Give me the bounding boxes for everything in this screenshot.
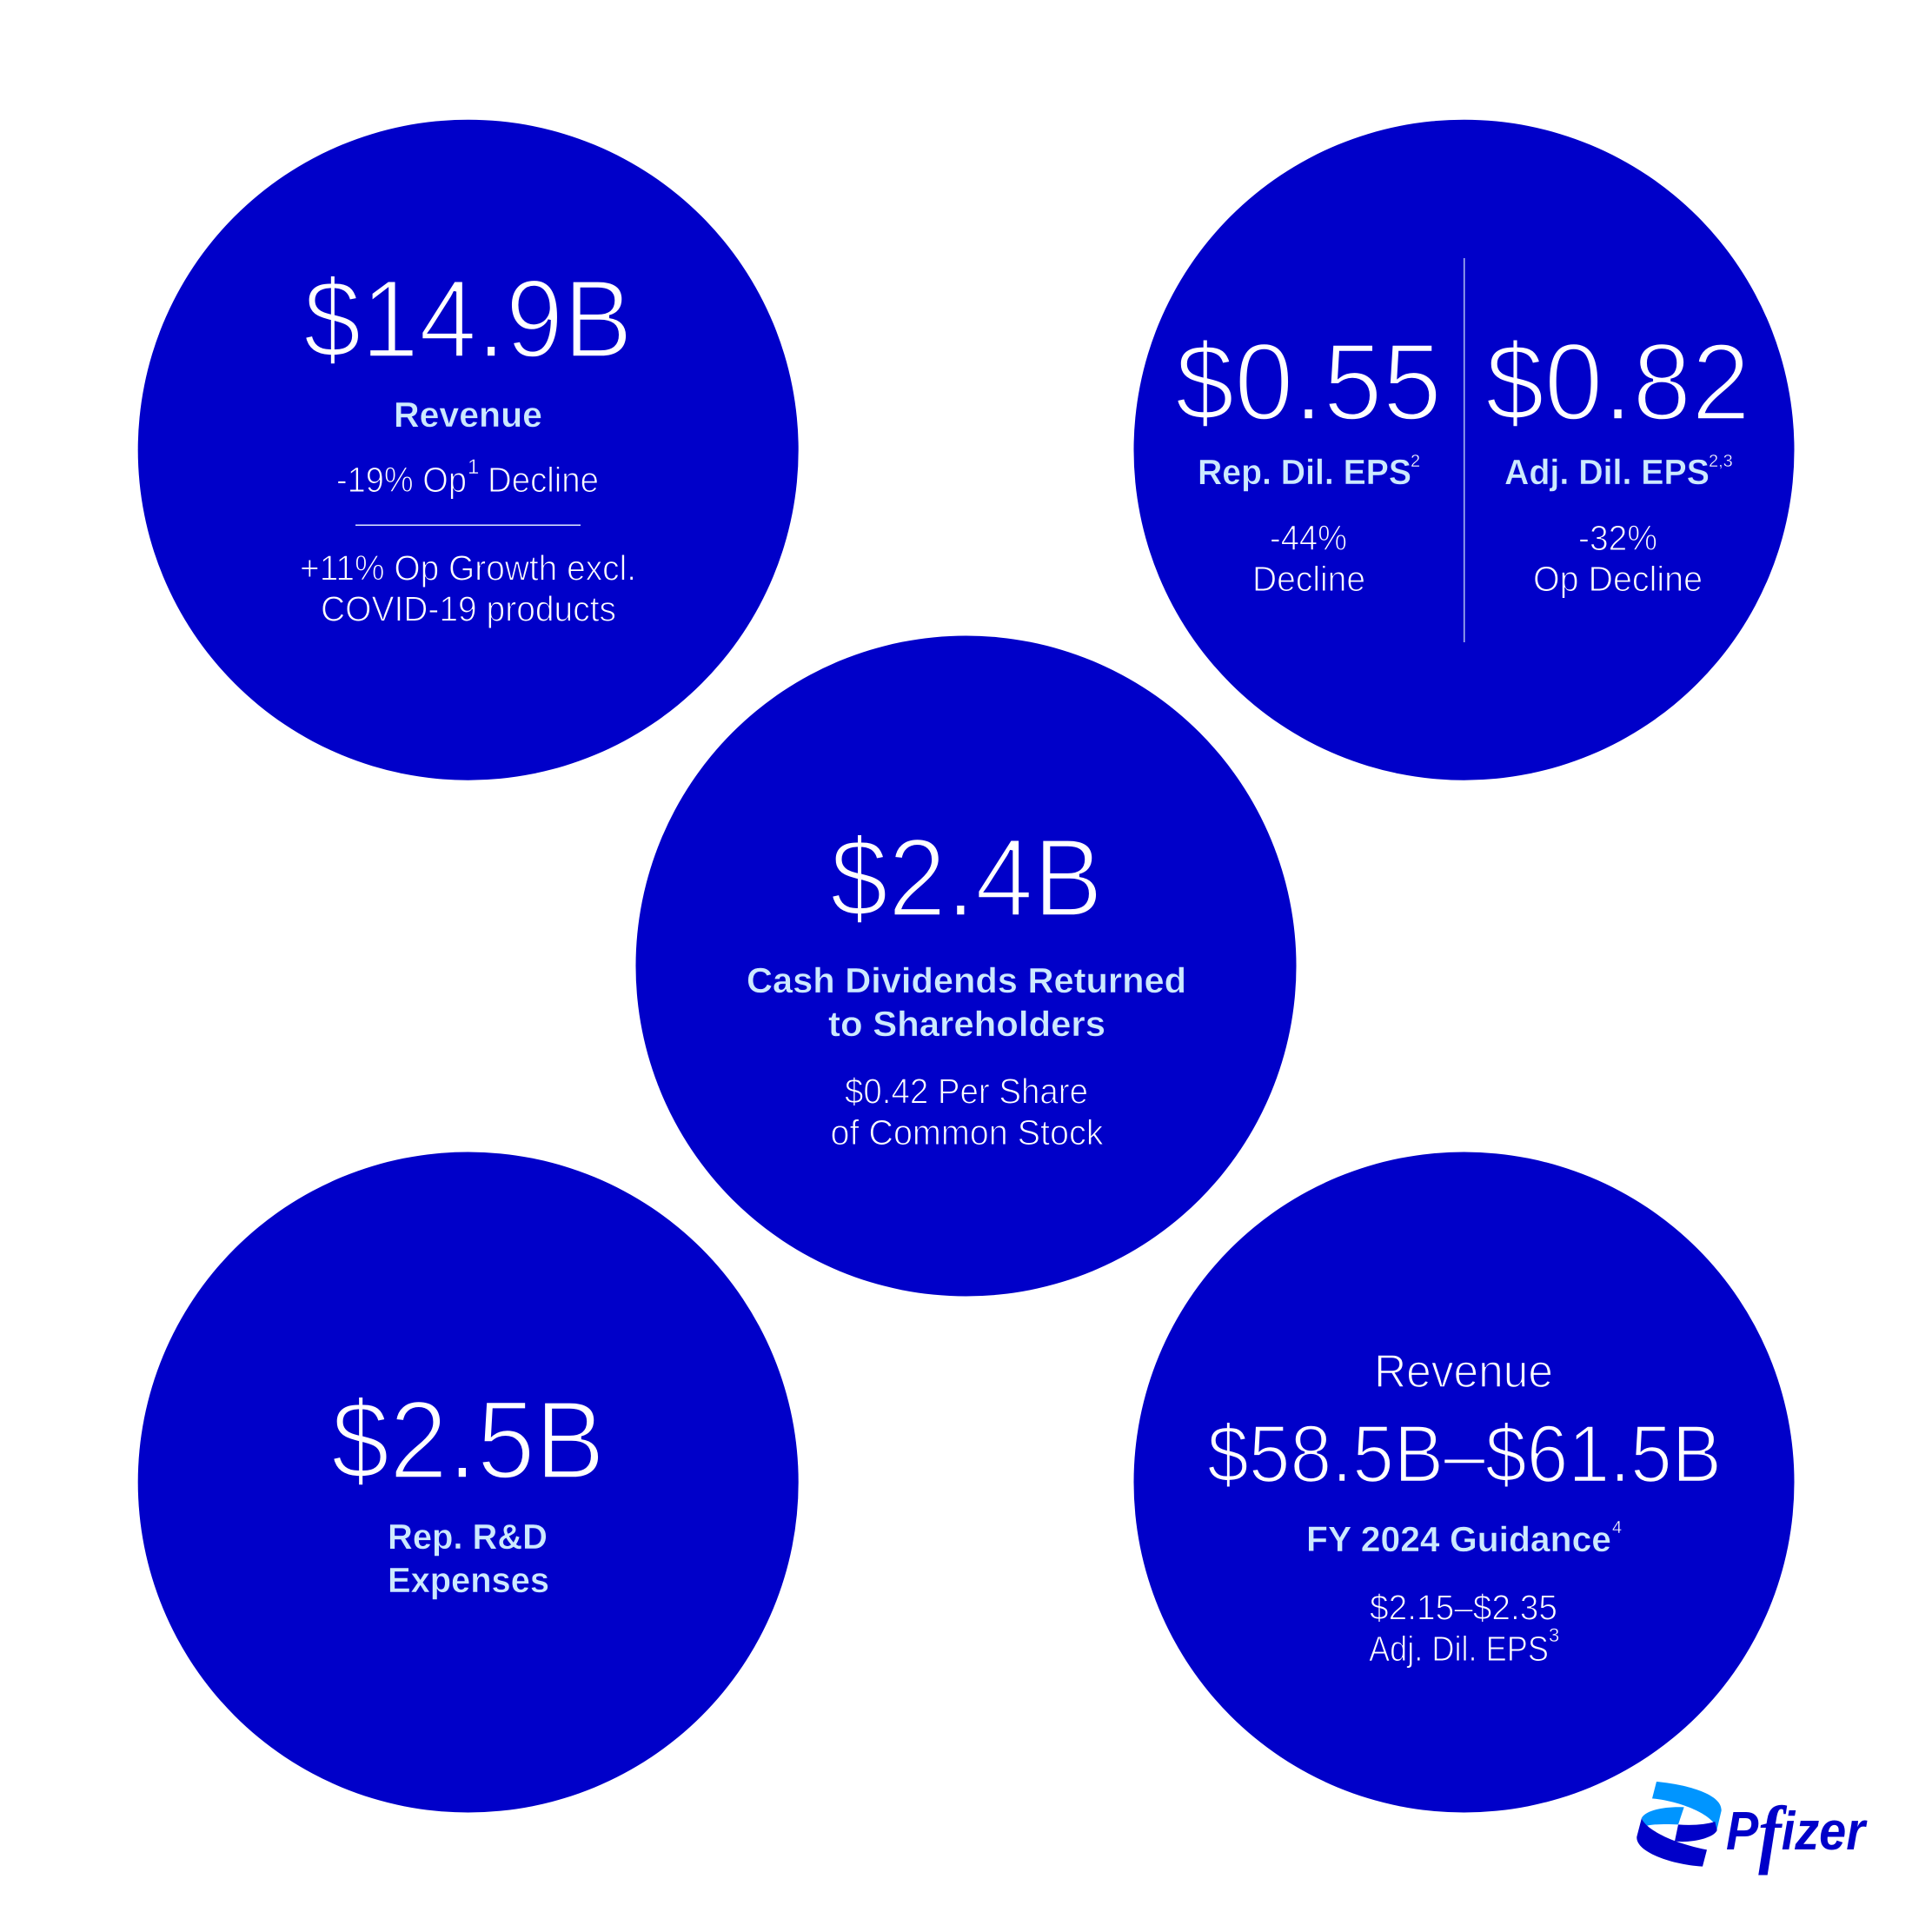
revenue value: $14.9B <box>303 257 633 382</box>
operational decline: Decline <box>488 460 599 500</box>
adjusted EPS column <box>1485 321 1750 599</box>
growth excluding COVID-19 note: COVID-19 products <box>321 589 616 629</box>
dividends label: Cash Dividends Returned <box>747 960 1186 1000</box>
adjusted EPS column: Op Decline <box>1533 559 1703 599</box>
dividends label: to Shareholders <box>828 1004 1105 1044</box>
guidance range value: $58.5B–$61.5B <box>1207 1408 1722 1499</box>
dividends label <box>747 960 1186 1044</box>
guidance EPS note: $2.15–$2.35 <box>1370 1587 1557 1627</box>
logo: Pfizer <box>1637 1782 1868 1876</box>
dividends value: $2.4B <box>830 816 1103 940</box>
guidance EPS note <box>1369 1587 1559 1669</box>
panel: earnings per share <box>1133 120 1794 780</box>
dividends per share note <box>831 1071 1104 1152</box>
operational decline <box>336 455 599 500</box>
reported EPS column: Rep. Dil. EPS <box>1198 452 1411 492</box>
reported EPS column: $0.55 <box>1175 321 1442 443</box>
dividends per share note: $0.42 Per Share <box>845 1071 1088 1111</box>
adjusted EPS column: $0.82 <box>1485 321 1750 443</box>
guidance label: 4 <box>1612 1518 1622 1537</box>
revenue label: Revenue <box>394 395 542 435</box>
panel: cash dividends <box>636 636 1297 1297</box>
adjusted EPS column: Adj. Dil. EPS <box>1504 452 1710 492</box>
dividends per share note: of Common Stock <box>831 1112 1104 1152</box>
panel: FY 2024 guidance <box>1133 1152 1794 1813</box>
guidance revenue heading: Revenue <box>1374 1345 1553 1398</box>
panel: R&D expenses <box>138 1152 799 1813</box>
growth excluding COVID-19 note <box>300 548 636 629</box>
reported EPS column <box>1175 321 1442 599</box>
operational decline: -19% Op <box>336 460 467 500</box>
R&D value: $2.5B <box>331 1378 605 1503</box>
panel: revenue <box>138 120 799 780</box>
wordmark: izer <box>1782 1802 1868 1862</box>
adjusted EPS column: -32% <box>1578 518 1657 558</box>
growth excluding COVID-19 note: +11% Op Growth excl. <box>300 548 636 588</box>
reported EPS column: Decline <box>1252 559 1365 599</box>
operational decline: 1 <box>468 455 479 479</box>
reported EPS column: -44% <box>1270 518 1347 558</box>
guidance EPS note: 3 <box>1549 1624 1559 1646</box>
R&D label <box>388 1517 549 1600</box>
wordmark: f <box>1758 1792 1788 1876</box>
adjusted EPS column: 2,3 <box>1709 452 1733 471</box>
guidance EPS note: Adj. Dil. EPS <box>1369 1629 1549 1669</box>
reported EPS column: 2 <box>1411 452 1420 471</box>
R&D label: Expenses <box>388 1560 549 1600</box>
icon: Pfizer ribbon <box>1637 1782 1722 1867</box>
wordmark: P <box>1726 1802 1762 1862</box>
R&D label: Rep. R&D <box>388 1517 548 1557</box>
guidance label: FY 2024 Guidance <box>1306 1519 1611 1559</box>
